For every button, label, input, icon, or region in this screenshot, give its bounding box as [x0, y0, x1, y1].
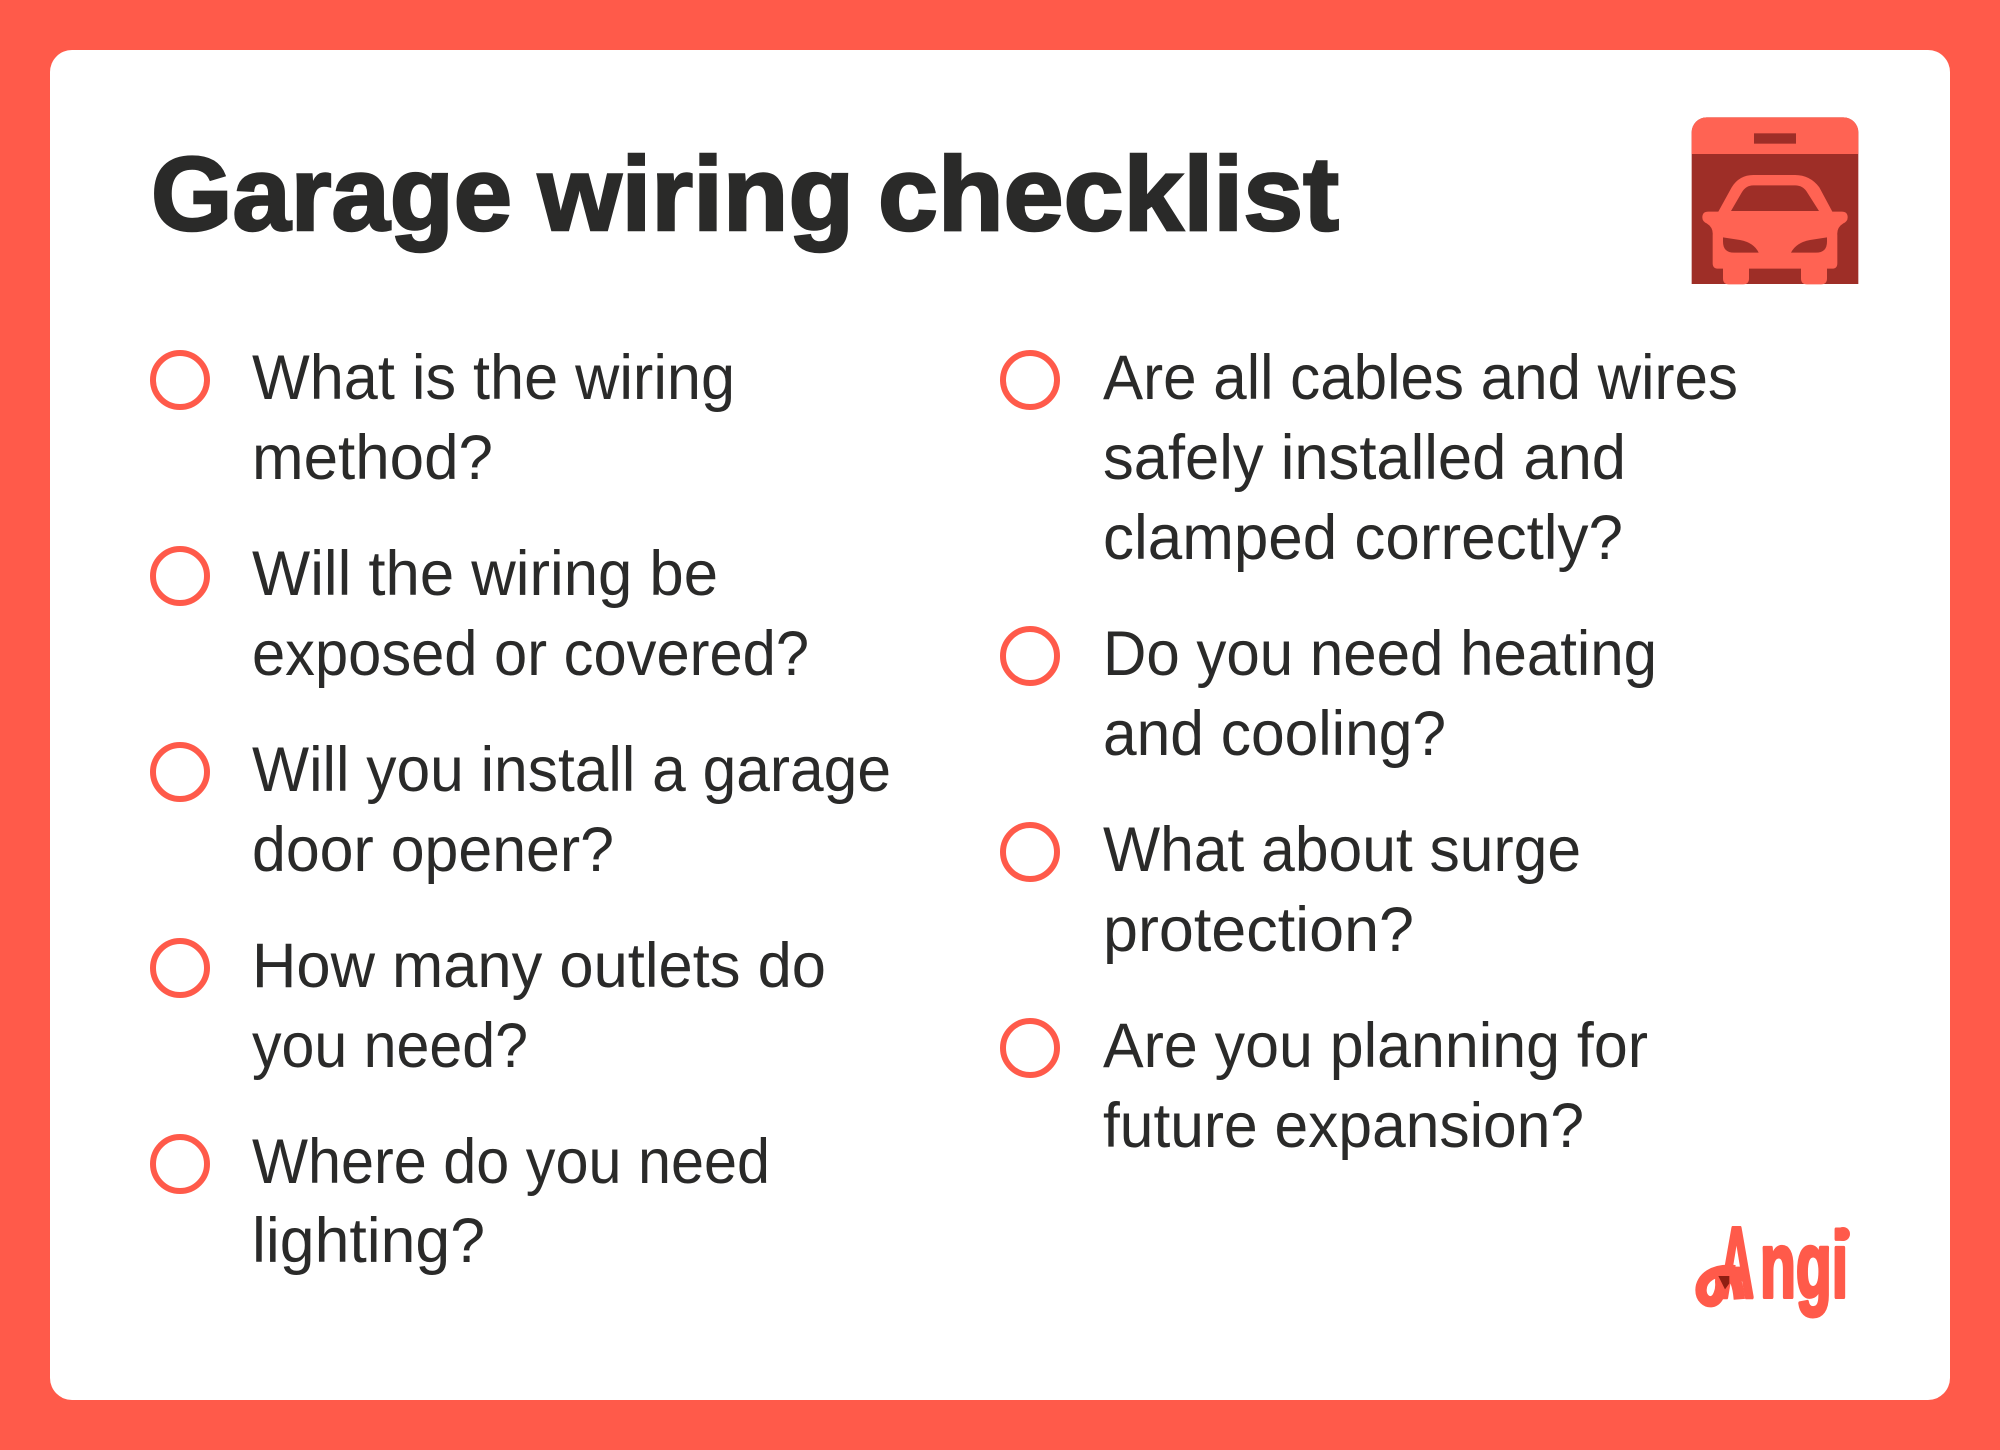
checklist item: heating and cooling: Do you need heating [1103, 619, 1657, 689]
checklist item: outlets: How many outlets do [252, 931, 826, 1001]
checklist item: future expansion: Are you planning for [1103, 1011, 1648, 1081]
checklist item: lighting [153, 1127, 770, 1276]
title [151, 136, 1339, 253]
checklist item: heating and cooling: and cooling? [1103, 699, 1446, 769]
checklist item: outlets: you need? [252, 1011, 528, 1081]
title: wiring [537, 136, 854, 253]
logo: Angi: A [1719, 1207, 1754, 1319]
logo: Angi [1701, 1207, 1850, 1319]
logo: Angi: ngi [1760, 1213, 1848, 1317]
checklist item: cables and wires: Are all cables and wires [1103, 343, 1738, 413]
checklist item: garage door opener: door opener? [252, 815, 614, 885]
checklist item: exposed or covered [153, 539, 809, 689]
checklist item: cables and wires: clamped correctly? [1103, 503, 1623, 573]
checklist item: heating and cooling [1003, 619, 1657, 769]
checklist item: garage door opener [153, 735, 891, 885]
checklist item: lighting: Where do you need [252, 1127, 770, 1197]
checklist item: cables and wires [1003, 343, 1738, 573]
icon: car in garage [1692, 117, 1858, 284]
checklist item: exposed or covered: exposed or covered? [252, 619, 809, 689]
title: checklist [878, 136, 1339, 253]
checklist item: wiring method [153, 343, 735, 493]
checklist item: cables and wires: safely installed and [1103, 423, 1626, 493]
checklist item: outlets [153, 931, 826, 1081]
checklist item: surge protection: protection? [1103, 895, 1414, 965]
title: Garage [151, 136, 512, 253]
checklist item: surge protection [1003, 815, 1581, 965]
checklist item: surge protection: What about surge [1103, 815, 1581, 885]
checklist item: wiring method: What is the wiring [252, 343, 735, 413]
checklist item: wiring method: method? [252, 423, 493, 493]
checklist item: lighting: lighting? [252, 1206, 485, 1276]
checklist item: exposed or covered: Will the wiring be [252, 539, 718, 609]
checklist item: garage door opener: Will you install a garage [252, 735, 891, 805]
checklist item: future expansion: future expansion? [1103, 1091, 1584, 1161]
checklist item: future expansion [1003, 1011, 1648, 1161]
